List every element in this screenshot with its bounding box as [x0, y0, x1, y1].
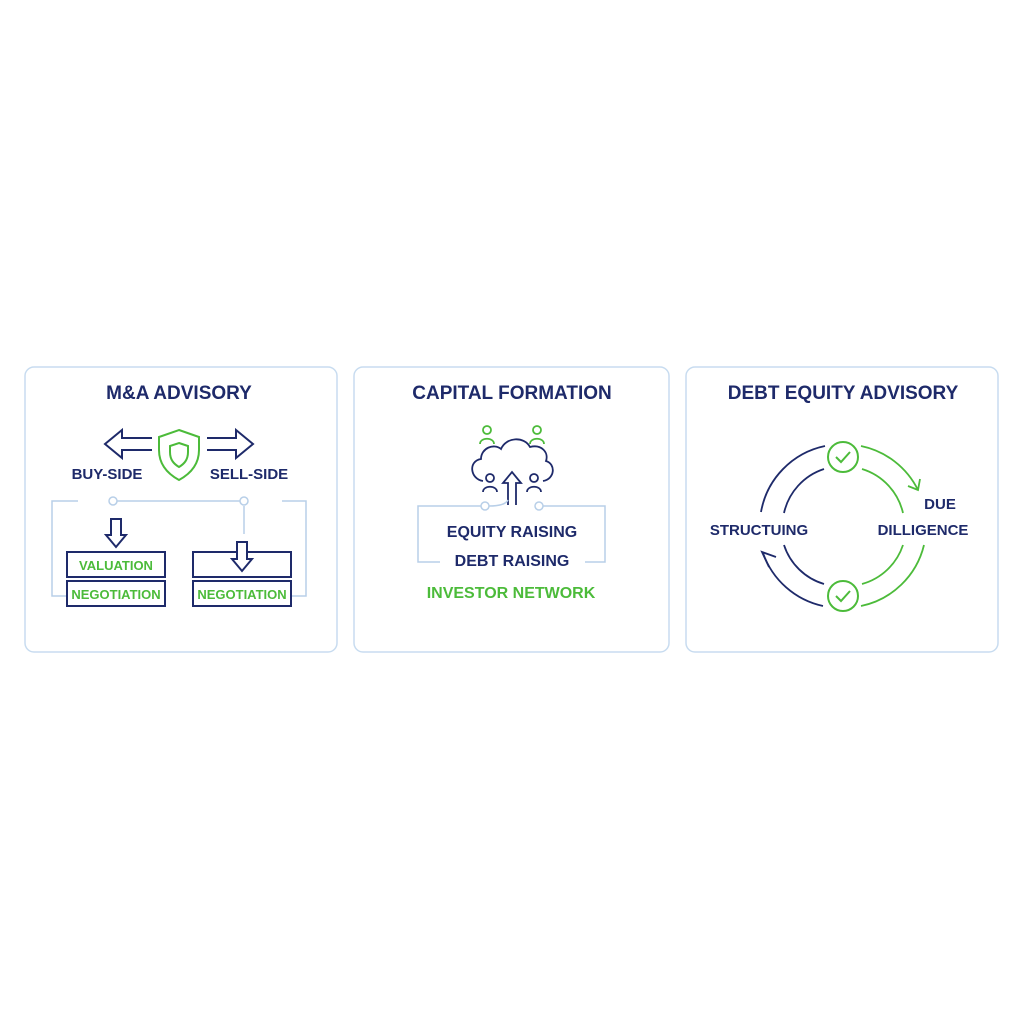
box: negotiation right: NEGOTIATION — [197, 587, 287, 602]
arrow: buy-side left — [105, 430, 152, 458]
box: valuation — [67, 552, 165, 577]
panel: debt equity advisory — [686, 367, 998, 652]
icon: green investors — [480, 426, 544, 444]
label: sell-side: SELL-SIDE — [210, 466, 288, 483]
arrow: down left — [106, 519, 126, 547]
label: buy-side: BUY-SIDE — [72, 466, 142, 483]
icon: cloud with people and arrow — [472, 439, 553, 505]
box: negotiation right — [193, 581, 291, 606]
icon: check bottom — [828, 581, 858, 611]
text: debt raising: DEBT RAISING — [455, 553, 569, 570]
arrow: down right — [232, 542, 252, 571]
heading: capital formation: CAPITAL FORMATION — [412, 383, 612, 404]
box: empty right — [193, 552, 291, 577]
box: negotiation left — [67, 581, 165, 606]
text: investor network: INVESTOR NETWORK — [427, 585, 596, 602]
label: due diligence: DUE — [924, 496, 956, 513]
box: negotiation left: NEGOTIATION — [71, 587, 161, 602]
cycle diagram — [761, 446, 924, 606]
arrow: sell-side right — [207, 430, 253, 458]
frame lines — [418, 500, 605, 562]
panel: M&A advisory — [25, 367, 337, 652]
text: equity raising: EQUITY RAISING — [447, 524, 577, 541]
box: valuation: VALUATION — [79, 558, 153, 573]
label: structuring: STRUCTUING — [710, 522, 808, 539]
icon: check top — [828, 442, 858, 472]
label: due diligence — [878, 496, 968, 539]
label: due diligence: DILLIGENCE — [878, 522, 968, 539]
icon: shield — [159, 430, 199, 480]
panel: capital formation — [354, 367, 669, 652]
heading: debt equity advisory: DEBT EQUITY ADVISORY — [728, 383, 959, 404]
connector lines — [52, 497, 306, 596]
heading: M&A advisory: M&A ADVISORY — [106, 383, 252, 404]
